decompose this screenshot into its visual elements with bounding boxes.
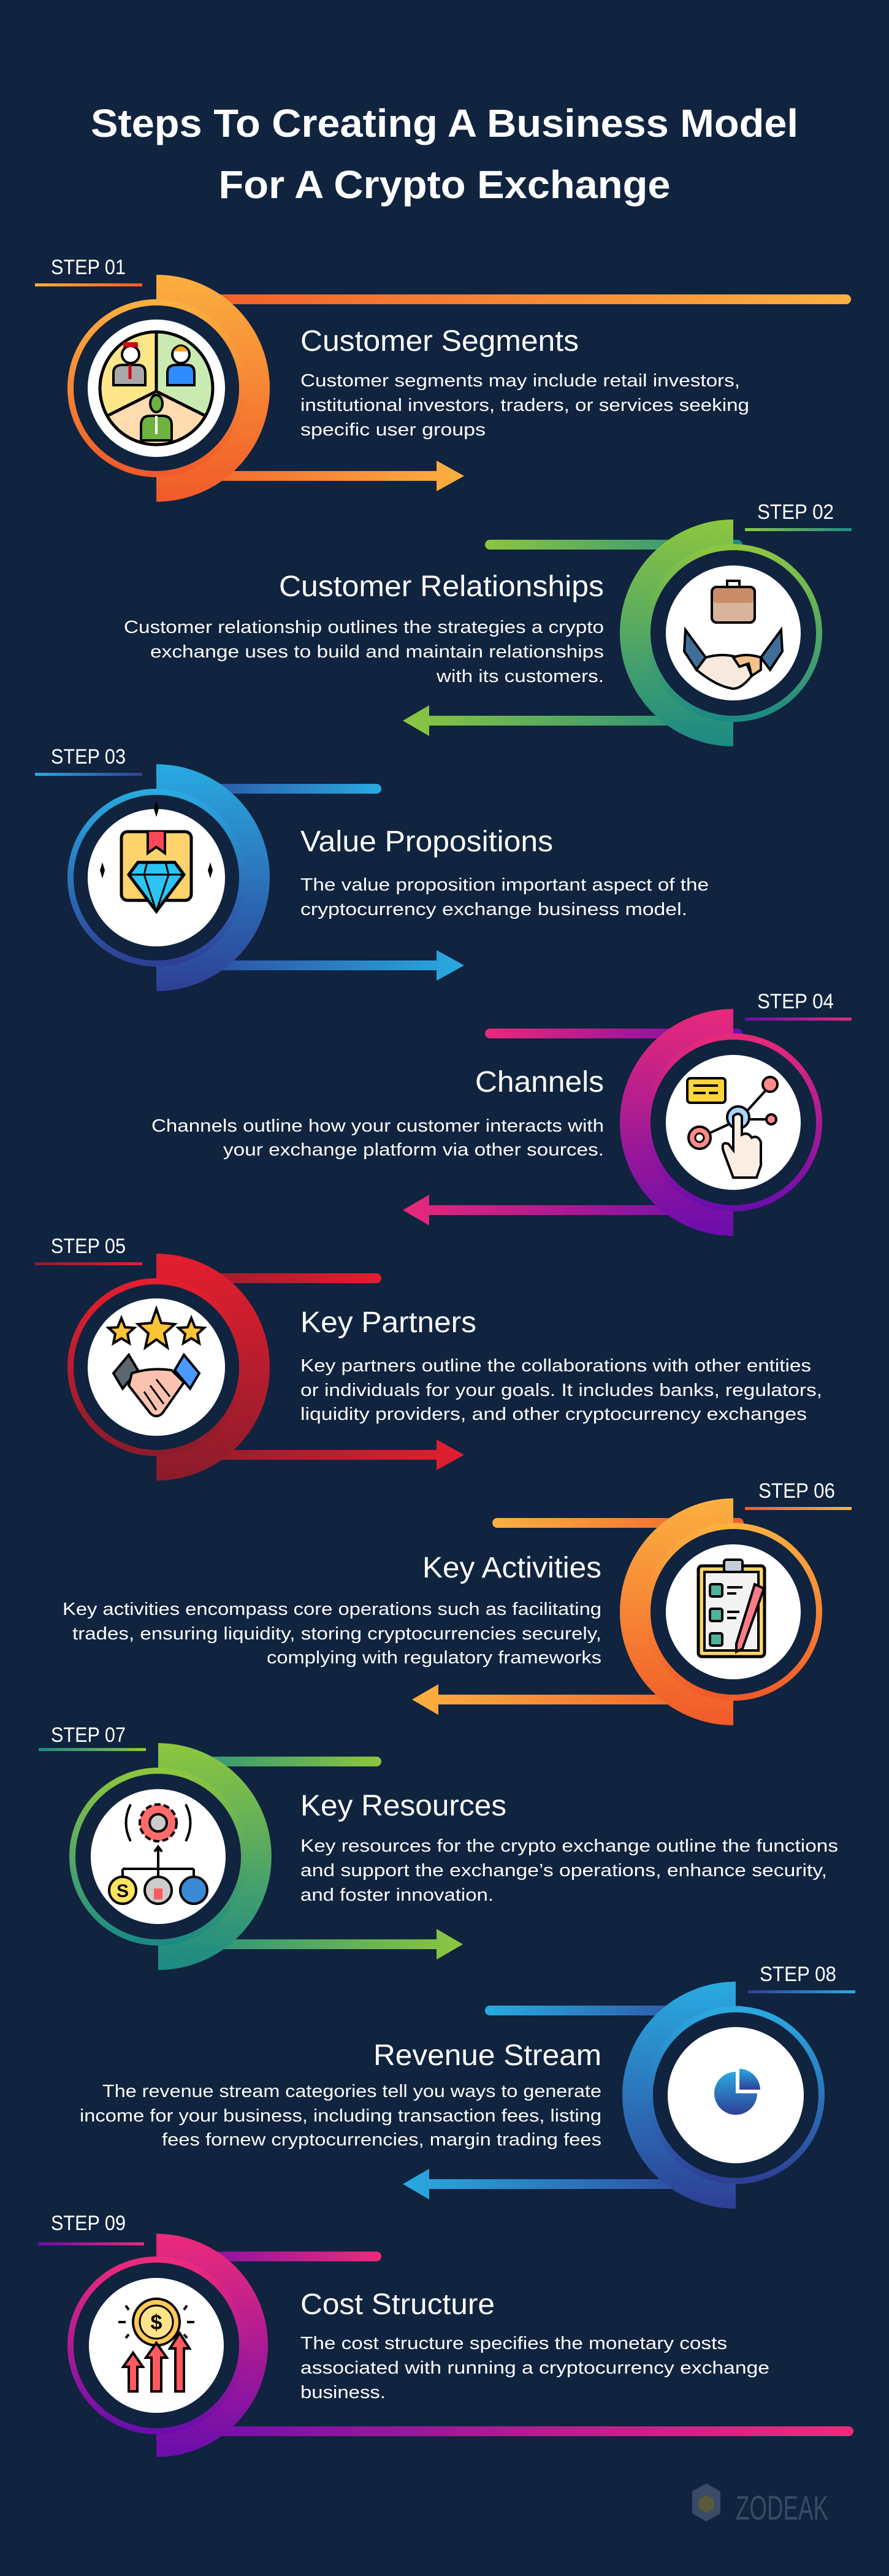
title: For A Crypto Exchange xyxy=(218,163,671,207)
panel: step 04 channels xyxy=(151,990,852,1236)
arrow right xyxy=(156,1439,464,1470)
text: key resources: and foster innovation. xyxy=(300,1885,494,1905)
step label 04 xyxy=(745,990,852,1021)
icon: handshake with briefcase xyxy=(684,581,782,689)
text: key partners: Key Partners xyxy=(300,1306,476,1339)
text: value propositions: The value proposition important aspect of the xyxy=(300,875,709,895)
text: channels: your exchange platform via other sources. xyxy=(223,1140,604,1160)
arrow right xyxy=(158,1929,463,1960)
logo: zodeak: ZODEAK xyxy=(736,2488,828,2527)
text: revenue stream: income for your business, including transaction fees, listing xyxy=(80,2106,601,2126)
text: cost structure: Cost Structure xyxy=(300,2288,495,2321)
text: value propositions xyxy=(300,826,709,919)
text: key activities: complying with regulatory frameworks xyxy=(267,1648,601,1668)
icon: gear network: S xyxy=(116,1881,129,1901)
text: key activities xyxy=(63,1552,601,1668)
text: key partners: or individuals for your goals. It includes banks, regulators, xyxy=(300,1381,822,1400)
text: channels xyxy=(151,1066,604,1160)
text: cost structure xyxy=(300,2288,769,2402)
step label 07 xyxy=(39,1723,146,1751)
text: key resources: Key Resources xyxy=(300,1790,506,1822)
text: revenue stream xyxy=(80,2039,601,2150)
icon: stars handshake xyxy=(109,1309,204,1416)
icon: customer segments xyxy=(100,332,213,445)
arrow right xyxy=(156,461,464,491)
text: channels: Channels xyxy=(475,1066,604,1098)
step label 01 xyxy=(35,256,142,286)
panel: step 05 key partners xyxy=(35,1235,822,1481)
arrow left xyxy=(403,705,733,736)
text: key resources xyxy=(300,1790,838,1905)
step label 03: STEP 03 xyxy=(51,745,126,769)
title xyxy=(91,101,798,207)
icon: gear network xyxy=(109,1804,207,1904)
text: customer segments: Customer Segments xyxy=(300,325,579,358)
step label 02: STEP 02 xyxy=(757,500,834,524)
step label 07: STEP 07 xyxy=(51,1723,126,1747)
text: customer relationships xyxy=(124,570,604,686)
text: key resources: and support the exchange’s operations, enhance security, xyxy=(300,1861,827,1880)
text: cost structure: The cost structure specifies the monetary costs xyxy=(300,2334,727,2353)
icon: diamond box xyxy=(100,801,213,911)
panel: step 02 customer relationships xyxy=(124,500,852,746)
text: key partners: liquidity providers, and other cryptocurrency exchanges xyxy=(300,1405,807,1424)
step label 01: STEP 01 xyxy=(51,256,126,279)
step label 06: STEP 06 xyxy=(758,1479,835,1503)
text: cost structure: associated with running a cryptocurrency exchange xyxy=(300,2358,769,2378)
step label 02 xyxy=(745,500,852,531)
text: value propositions: cryptocurrency exchange business model. xyxy=(300,900,687,919)
step label 05 xyxy=(35,1235,142,1265)
step label 09 xyxy=(38,2212,144,2245)
panel: step 07 key resources xyxy=(39,1723,838,1970)
step label 08 xyxy=(748,1963,855,1993)
text: customer segments: specific user groups xyxy=(300,420,486,440)
icon: coin growth xyxy=(118,2299,194,2391)
arrow left xyxy=(403,1195,733,1225)
text: customer segments xyxy=(300,325,749,440)
panel: step 09 cost structure xyxy=(38,2212,853,2457)
text: key partners xyxy=(300,1306,822,1424)
text: key resources: Key resources for the crypto exchange outline the functions xyxy=(300,1836,838,1856)
panel: step 01 customer segments xyxy=(35,256,851,502)
arrow left xyxy=(412,1684,733,1715)
icon: channels touch xyxy=(687,1077,777,1178)
step label 03 xyxy=(35,745,142,776)
step label 09: STEP 09 xyxy=(51,2212,126,2235)
text: customer segments: Customer segments may include retail investors, xyxy=(300,371,740,391)
text: key activities: Key Activities xyxy=(422,1552,601,1584)
arrow right xyxy=(156,950,464,981)
text: customer relationships: with its customers. xyxy=(436,667,604,686)
text: customer relationships: exchange uses to build and maintain relationships xyxy=(150,642,604,662)
title: Steps To Creating A Business Model xyxy=(91,101,798,145)
text: channels: Channels outline how your customer interacts with xyxy=(151,1116,604,1136)
step label 05: STEP 05 xyxy=(51,1235,126,1258)
text: customer relationships: Customer relationship outlines the strategies a crypto xyxy=(124,618,604,637)
icon: coin growth: $ xyxy=(151,2311,162,2334)
text: key activities: Key activities encompass core operations such as facilitating xyxy=(63,1600,601,1619)
text: cost structure: business. xyxy=(300,2383,386,2402)
text: key activities: trades, ensuring liquidity, storing cryptocurrencies securely, xyxy=(72,1624,601,1644)
text: customer relationships: Customer Relationships xyxy=(279,570,604,603)
step label 04: STEP 04 xyxy=(757,990,834,1013)
text: key partners: Key partners outline the collaborations with other entities xyxy=(300,1356,811,1376)
logo: zodeak xyxy=(692,2483,828,2527)
panel: step 08 revenue stream xyxy=(80,1963,855,2209)
panel: step 06 key activities xyxy=(63,1479,852,1725)
text: revenue stream: fees fornew cryptocurrencies, margin trading fees xyxy=(162,2130,601,2150)
text: revenue stream: The revenue stream categories tell you ways to generate xyxy=(102,2082,601,2101)
arrow left xyxy=(403,2169,736,2199)
icon: clipboard xyxy=(698,1560,765,1657)
text: revenue stream: Revenue Stream xyxy=(373,2039,601,2072)
text: customer segments: institutional investors, traders, or services seeking xyxy=(300,396,749,415)
step label 08: STEP 08 xyxy=(760,1963,836,1986)
panel: step 03 value propositions xyxy=(35,745,709,991)
text: value propositions: Value Propositions xyxy=(300,826,553,858)
step label 06 xyxy=(745,1479,852,1510)
icon: pie chart xyxy=(714,2069,760,2115)
